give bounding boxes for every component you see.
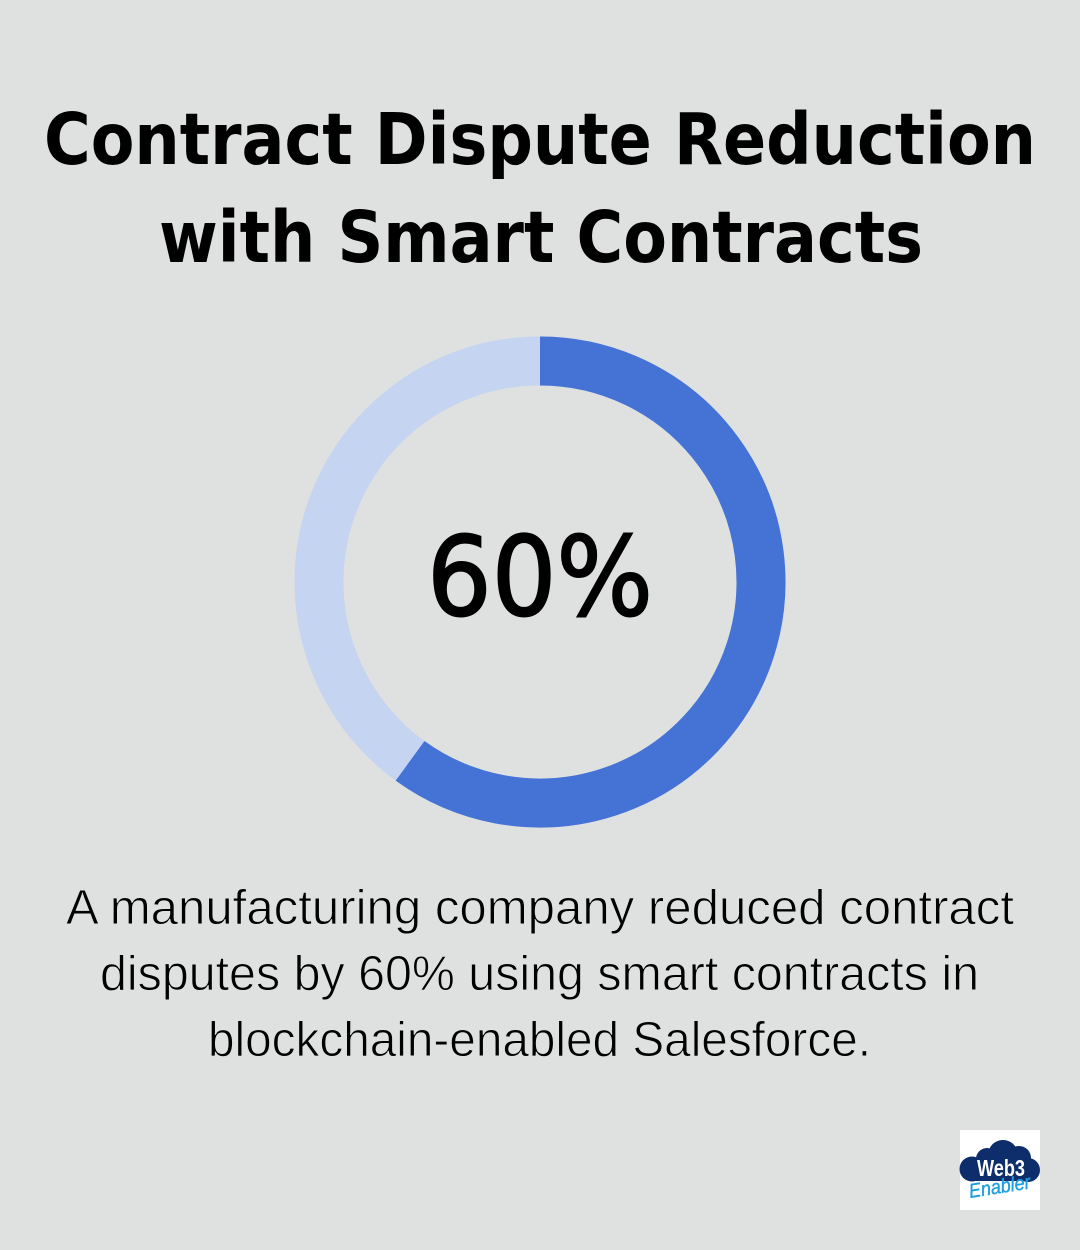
description text: disputes by 60% using smart contracts in	[100, 947, 979, 1001]
title	[44, 98, 1036, 279]
icon: Web3 Enabler logo: Web3	[977, 1155, 1025, 1181]
icon: Web3 Enabler logo: Enabler	[967, 1171, 1033, 1203]
description text: blockchain-enabled Salesforce.	[208, 1013, 871, 1067]
icon: Web3 Enabler logo	[960, 1130, 1040, 1210]
donut chart: 60%	[319, 361, 761, 803]
description text: A manufacturing company reduced contract	[66, 881, 1014, 935]
donut value: 60%	[427, 513, 653, 641]
title: with Smart Contracts	[159, 196, 923, 279]
description text	[66, 881, 1014, 1067]
